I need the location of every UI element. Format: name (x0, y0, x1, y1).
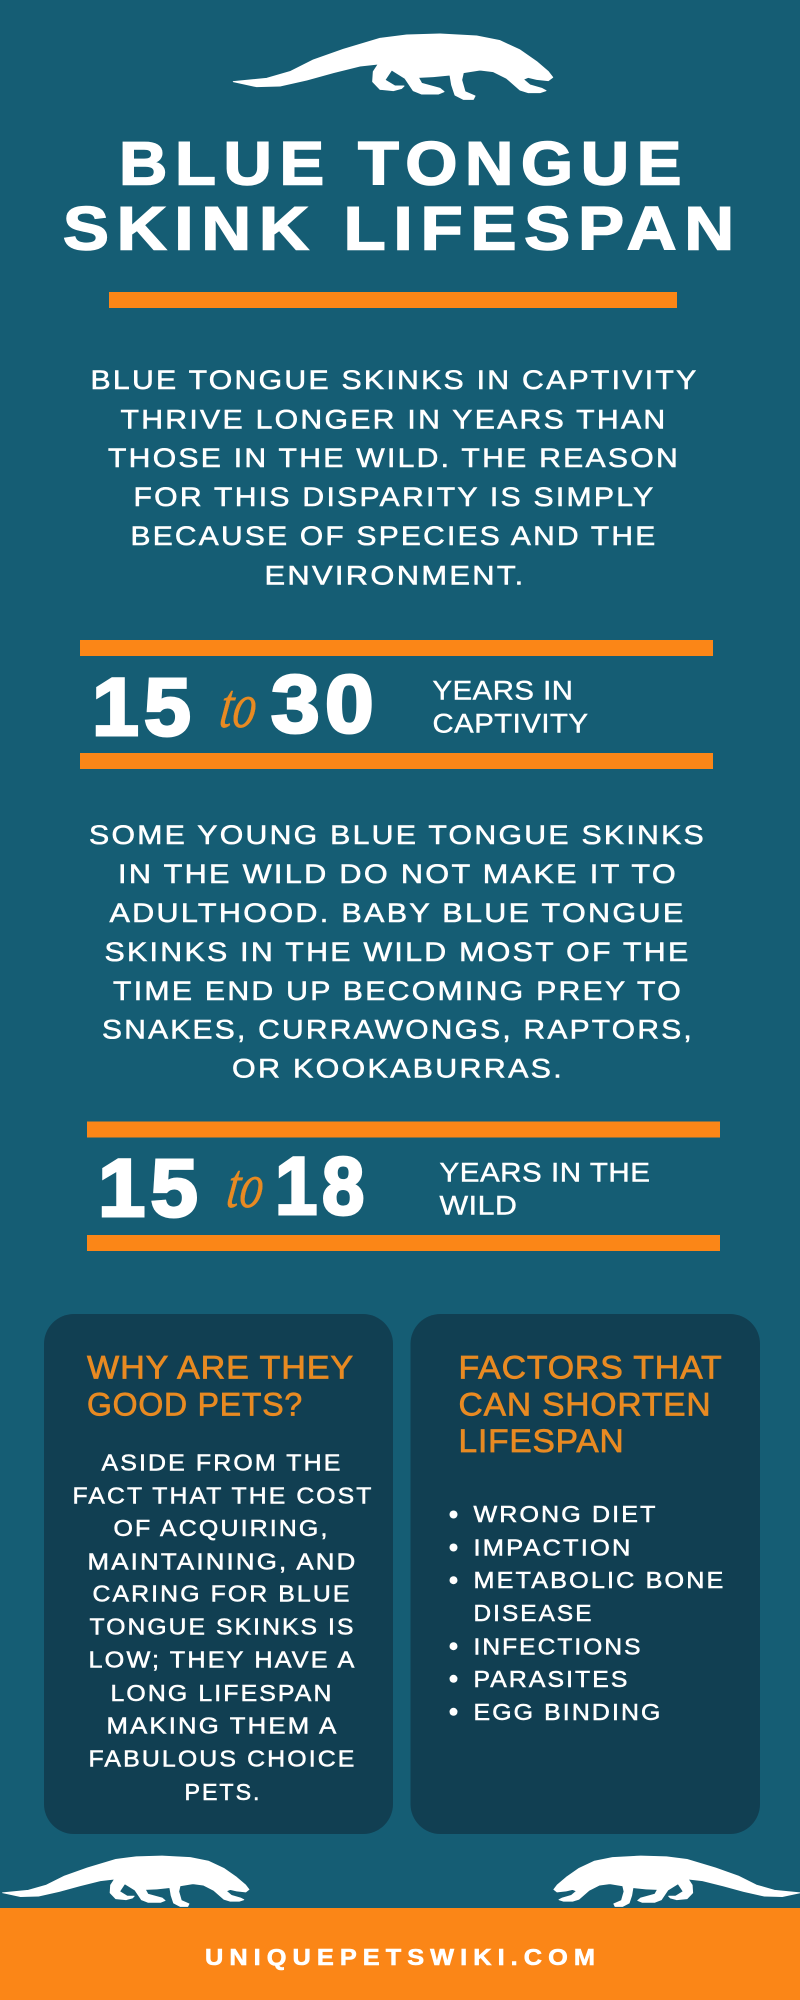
text block: why good pets: MAKING THEM A (106, 1713, 338, 1739)
text block: captivity intro: THOSE IN THE WILD. THE REASON (108, 443, 680, 473)
text block: captivity intro: ENVIRONMENT. (264, 560, 526, 590)
footer band (0, 1908, 800, 2000)
stat: 15 to 30 years in captivity: YEARS IN (432, 676, 574, 706)
heading: why good pets: GOOD PETS? (87, 1386, 303, 1422)
list: factors: DISEASE (474, 1600, 594, 1626)
heading: factors: CAN SHORTEN (458, 1386, 712, 1422)
text block: why good pets: PETS. (184, 1779, 262, 1805)
text block: wild intro: OR KOOKABURRAS. (232, 1053, 564, 1083)
list: factors: IMPACTION (474, 1534, 632, 1560)
panel: factors that can shorten lifespan (410, 1314, 760, 1834)
heading: factors: FACTORS THAT (458, 1350, 722, 1386)
text block: captivity intro: BLUE TONGUE SKINKS IN CAPTIVITY (90, 365, 698, 395)
list: factors (450, 1501, 726, 1725)
stat: 15 to 18 years in the wild: YEARS IN THE (440, 1158, 650, 1188)
text block: why good pets: MAINTAINING, AND (88, 1548, 358, 1574)
text block: why good pets: LOW; THEY HAVE A (88, 1647, 356, 1673)
stat: 15 to 18 years in the wild: 18 (275, 1141, 369, 1232)
icon: skink silhouette bottom right (554, 1856, 800, 1906)
stat: 15 to 18 years in the wild: WILD (440, 1190, 518, 1220)
heading: why good pets (87, 1350, 354, 1422)
list: factors: PARASITES (474, 1666, 630, 1692)
text block: captivity intro: THRIVE LONGER IN YEARS THAN (120, 404, 668, 434)
text block: why good pets: OF ACQUIRING, (114, 1515, 330, 1541)
text block: why good pets: LONG LIFESPAN (110, 1680, 334, 1706)
text block: why good pets: ASIDE FROM THE (102, 1449, 342, 1475)
text block: wild intro: ADULTHOOD. BABY BLUE TONGUE (110, 898, 686, 928)
stat: 15 to 30 years in captivity: 15 (92, 662, 196, 753)
icon: skink silhouette bottom left (3, 1856, 249, 1906)
list: factors: WRONG DIET (474, 1501, 658, 1527)
text block: captivity intro: FOR THIS DISPARITY IS SIMPLY (134, 482, 656, 512)
heading: factors (458, 1350, 722, 1459)
text block: wild intro: SOME YOUNG BLUE TONGUE SKINKS (89, 820, 706, 850)
panel: why are they good pets (44, 1314, 393, 1834)
text block: why good pets: FACT THAT THE COST (72, 1482, 374, 1508)
stat: 15 to 30 years in captivity: CAPTIVITY (432, 708, 588, 738)
text block: wild intro: SNAKES, CURRAWONGS, RAPTORS, (102, 1014, 694, 1044)
text block: captivity intro (90, 365, 698, 590)
title: BLUE TONGUE (119, 130, 689, 198)
stat: 15 to 30 years in captivity: to (216, 670, 262, 741)
stat: 15 to 18 years in the wild: to (223, 1150, 269, 1221)
stat: 15 to 18 years in the wild (87, 1122, 720, 1251)
title underline bar (109, 292, 677, 308)
text block: captivity intro: BECAUSE OF SPECIES AND THE (130, 521, 658, 551)
title: SKINK LIFESPAN (63, 194, 742, 262)
title (63, 130, 742, 262)
stat: 15 to 30 years in captivity: 30 (271, 659, 379, 750)
list: factors: EGG BINDING (474, 1699, 662, 1725)
heading: factors: LIFESPAN (458, 1423, 624, 1459)
icon: skink silhouette top (233, 34, 553, 99)
text block: why good pets: FABULOUS CHOICE (88, 1746, 356, 1772)
text block: why good pets: TONGUE SKINKS IS (90, 1614, 356, 1640)
text block: wild intro: TIME END UP BECOMING PREY TO (113, 976, 683, 1006)
text block: wild intro: IN THE WILD DO NOT MAKE IT TO (118, 859, 678, 889)
text block: wild intro (89, 820, 706, 1083)
list: factors: METABOLIC BONE (474, 1567, 726, 1593)
text block: why good pets: CARING FOR BLUE (92, 1581, 352, 1607)
heading: why good pets: WHY ARE THEY (87, 1350, 354, 1386)
stat: 15 to 30 years in captivity (80, 640, 713, 769)
footer website text: UNIQUEPETSWIKI.COM (205, 1944, 601, 1970)
list: factors: INFECTIONS (474, 1634, 642, 1660)
text block: why good pets (72, 1449, 374, 1805)
stat: 15 to 18 years in the wild: 15 (98, 1143, 203, 1234)
text block: wild intro: SKINKS IN THE WILD MOST OF THE (104, 937, 690, 967)
